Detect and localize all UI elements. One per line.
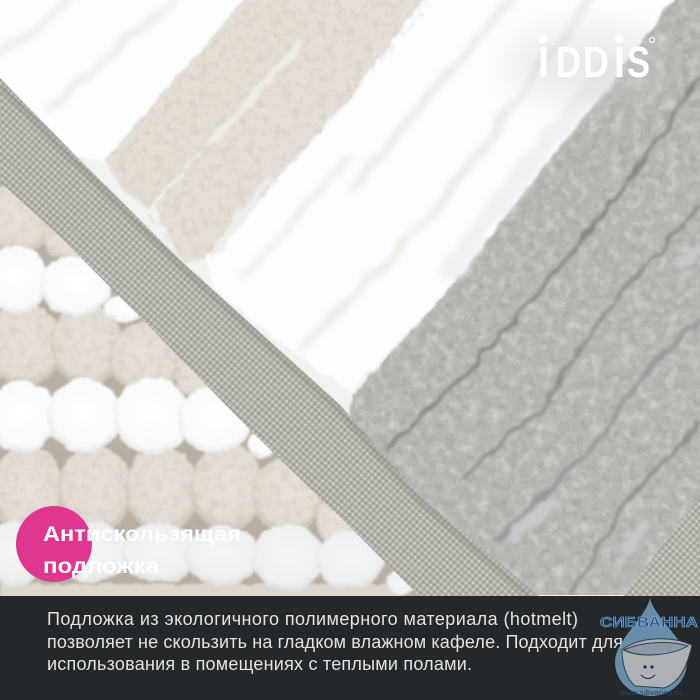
beige row 2 [0, 303, 216, 397]
badge heading: Антискользящая [43, 523, 241, 546]
white strands centre [205, 0, 680, 392]
logo: IDDIS [538, 34, 655, 87]
grain on gray strands [352, 0, 700, 595]
white row 3 [0, 377, 276, 459]
url: www.sibvanna.ru [620, 690, 682, 697]
logo: IDDIS: I [614, 38, 625, 87]
description text: использования в помещениях с теплыми полами. [47, 654, 472, 674]
strand separators [215, 44, 700, 593]
logo: IDDIS: I [538, 38, 549, 87]
drop [615, 598, 687, 696]
bathtub rim [624, 643, 688, 655]
brand text: СИБВАННА [600, 614, 698, 631]
logo: IDDIS: D [583, 38, 609, 87]
description text: Подложка из экологичного полимерного материала (hotmelt) [47, 609, 578, 629]
white strands top-left [0, 0, 260, 165]
backing corner bottom right [623, 497, 700, 597]
logo: IDDIS: S [627, 38, 650, 87]
badge heading: подложка [43, 555, 159, 578]
pink circle badge [16, 506, 92, 582]
logo backdrop shading [510, 29, 670, 101]
bathtub [622, 639, 692, 688]
white row 5 [0, 519, 414, 596]
pompom rows: lower-left area [0, 170, 440, 604]
beige row 0 [0, 185, 80, 258]
white row 1 [0, 246, 145, 322]
logo: IDDIS: D [556, 38, 581, 87]
anti-slip backing band [0, 78, 540, 597]
bottom dark panel [0, 596, 700, 700]
beige strand 2 [155, 0, 436, 262]
beige strand 1 [105, 0, 338, 205]
beige row 4 [0, 444, 353, 546]
watermark: Sibvanna drop logo [600, 598, 698, 697]
face [641, 665, 655, 678]
grain on beige strands [110, 0, 426, 258]
pompom grain [0, 202, 335, 525]
description text: позволяет не скользить на гладком влажном кафеле. Подходит для [47, 632, 623, 652]
beige row 6 [0, 581, 402, 596]
gray strands right [340, 0, 700, 610]
soft shading in white strands [0, 0, 610, 350]
